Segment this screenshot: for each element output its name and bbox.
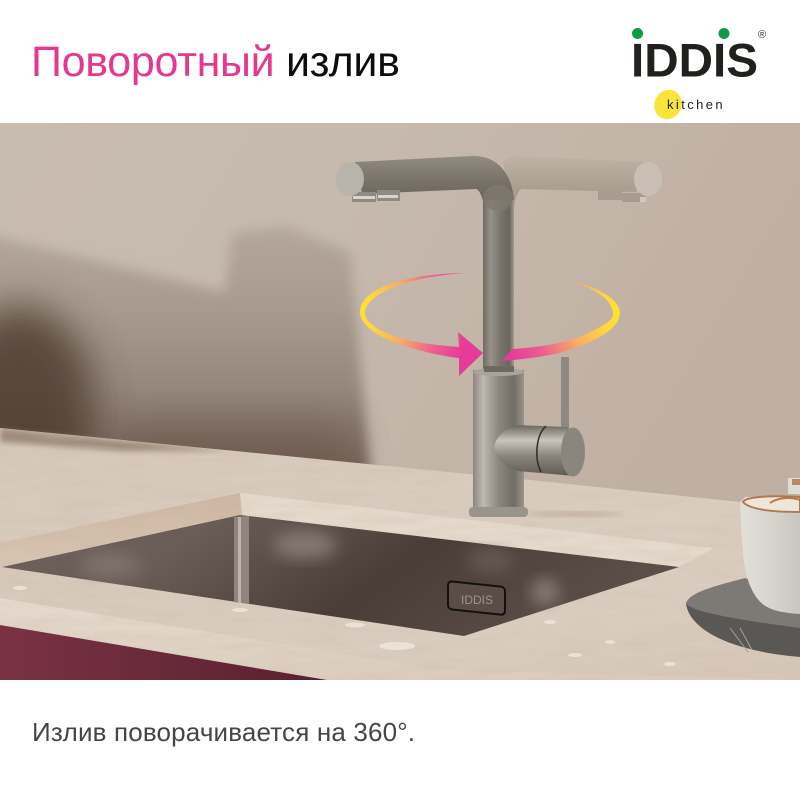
- body top rim: [473, 368, 524, 376]
- left lip: [0, 493, 242, 567]
- logo kitchen word: kitchen: [667, 97, 725, 112]
- sink drain badge: IDDIS: [461, 593, 493, 607]
- sink cut-out inner lip: [0, 493, 714, 568]
- kitchen photo scene: [0, 123, 800, 680]
- coffee cup: [740, 496, 800, 614]
- basin reflections: [273, 531, 337, 559]
- marble plate: [686, 578, 800, 657]
- handle end cap: [561, 428, 585, 476]
- handle seam: [537, 426, 546, 472]
- registered mark: ®: [758, 29, 766, 41]
- faucet: [336, 156, 662, 517]
- countertop: [0, 428, 743, 636]
- basin corner highlight: [234, 516, 249, 604]
- stone veining: [51, 438, 472, 646]
- sink drain badge: [448, 581, 505, 615]
- spout end cap: [336, 162, 364, 196]
- handle lever: [561, 357, 569, 429]
- countertop front edge: [678, 552, 706, 568]
- rotation arrow left: [360, 273, 483, 376]
- wall shadows: [0, 226, 378, 465]
- rotation arrow right: [502, 279, 620, 361]
- logo wordmark: IDDIS: [631, 34, 758, 86]
- ghost spout rotated right: [503, 161, 662, 206]
- handle cylinder: [494, 425, 574, 476]
- logo green dot right: [718, 28, 730, 39]
- counter shadow near left wall: [0, 428, 230, 451]
- sink basin: [2, 515, 679, 636]
- logo yellow blob: [649, 85, 687, 124]
- logo: IDDIS kitchen: [631, 28, 766, 124]
- maroon cabinet: [0, 625, 327, 680]
- second cup: [788, 478, 800, 494]
- front stone lip: [0, 598, 225, 638]
- spout nozzles left: [352, 190, 400, 202]
- spout elbow: [483, 185, 513, 211]
- faucet contact shadow: [527, 512, 623, 516]
- wall: [0, 123, 800, 523]
- stone flecks: [13, 586, 707, 666]
- rear lip: [240, 493, 714, 568]
- faucet body: [473, 370, 524, 508]
- faucet base flange: [469, 507, 528, 517]
- sink basin group: [2, 515, 679, 636]
- spout tube: [483, 200, 514, 372]
- spout arm left: [355, 156, 514, 201]
- title: Поворотный излив: [31, 38, 400, 86]
- logo green dot left: [632, 28, 643, 39]
- caption: Излив поворачивается на 360°.: [32, 717, 415, 747]
